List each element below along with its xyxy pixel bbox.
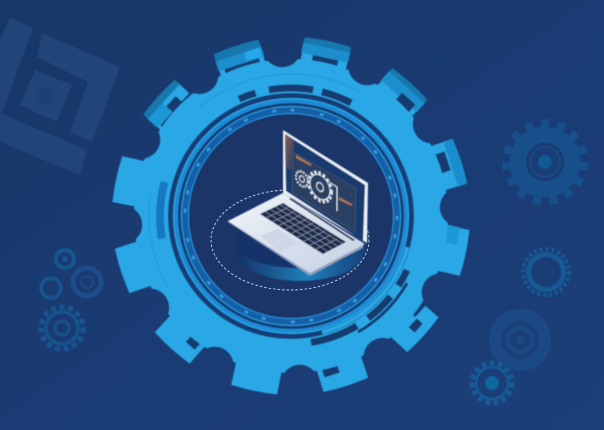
hinge	[289, 198, 355, 241]
gear body	[134, 59, 448, 373]
small gear: top right	[507, 124, 583, 200]
gear ring details	[149, 74, 433, 358]
platform disk	[234, 214, 365, 281]
small gears: left cluster	[41, 250, 101, 349]
keyboard	[260, 203, 346, 254]
dashed orbit ellipse	[211, 190, 369, 290]
gear shape with notches	[111, 36, 471, 396]
laptop screen	[283, 130, 368, 243]
laptop base	[228, 220, 363, 276]
small gear: right bottom	[472, 363, 512, 403]
trackpad	[260, 229, 299, 252]
orange bars	[296, 155, 311, 166]
gear teeth	[111, 36, 471, 396]
screen window	[292, 152, 356, 232]
laptop	[228, 130, 368, 276]
small gear: right lower large	[495, 315, 545, 365]
small gear: right middle	[523, 249, 569, 295]
gear center	[189, 114, 393, 318]
watermark: square logo	[0, 17, 120, 175]
main gear	[111, 36, 471, 396]
settings gears on screen	[296, 168, 337, 211]
